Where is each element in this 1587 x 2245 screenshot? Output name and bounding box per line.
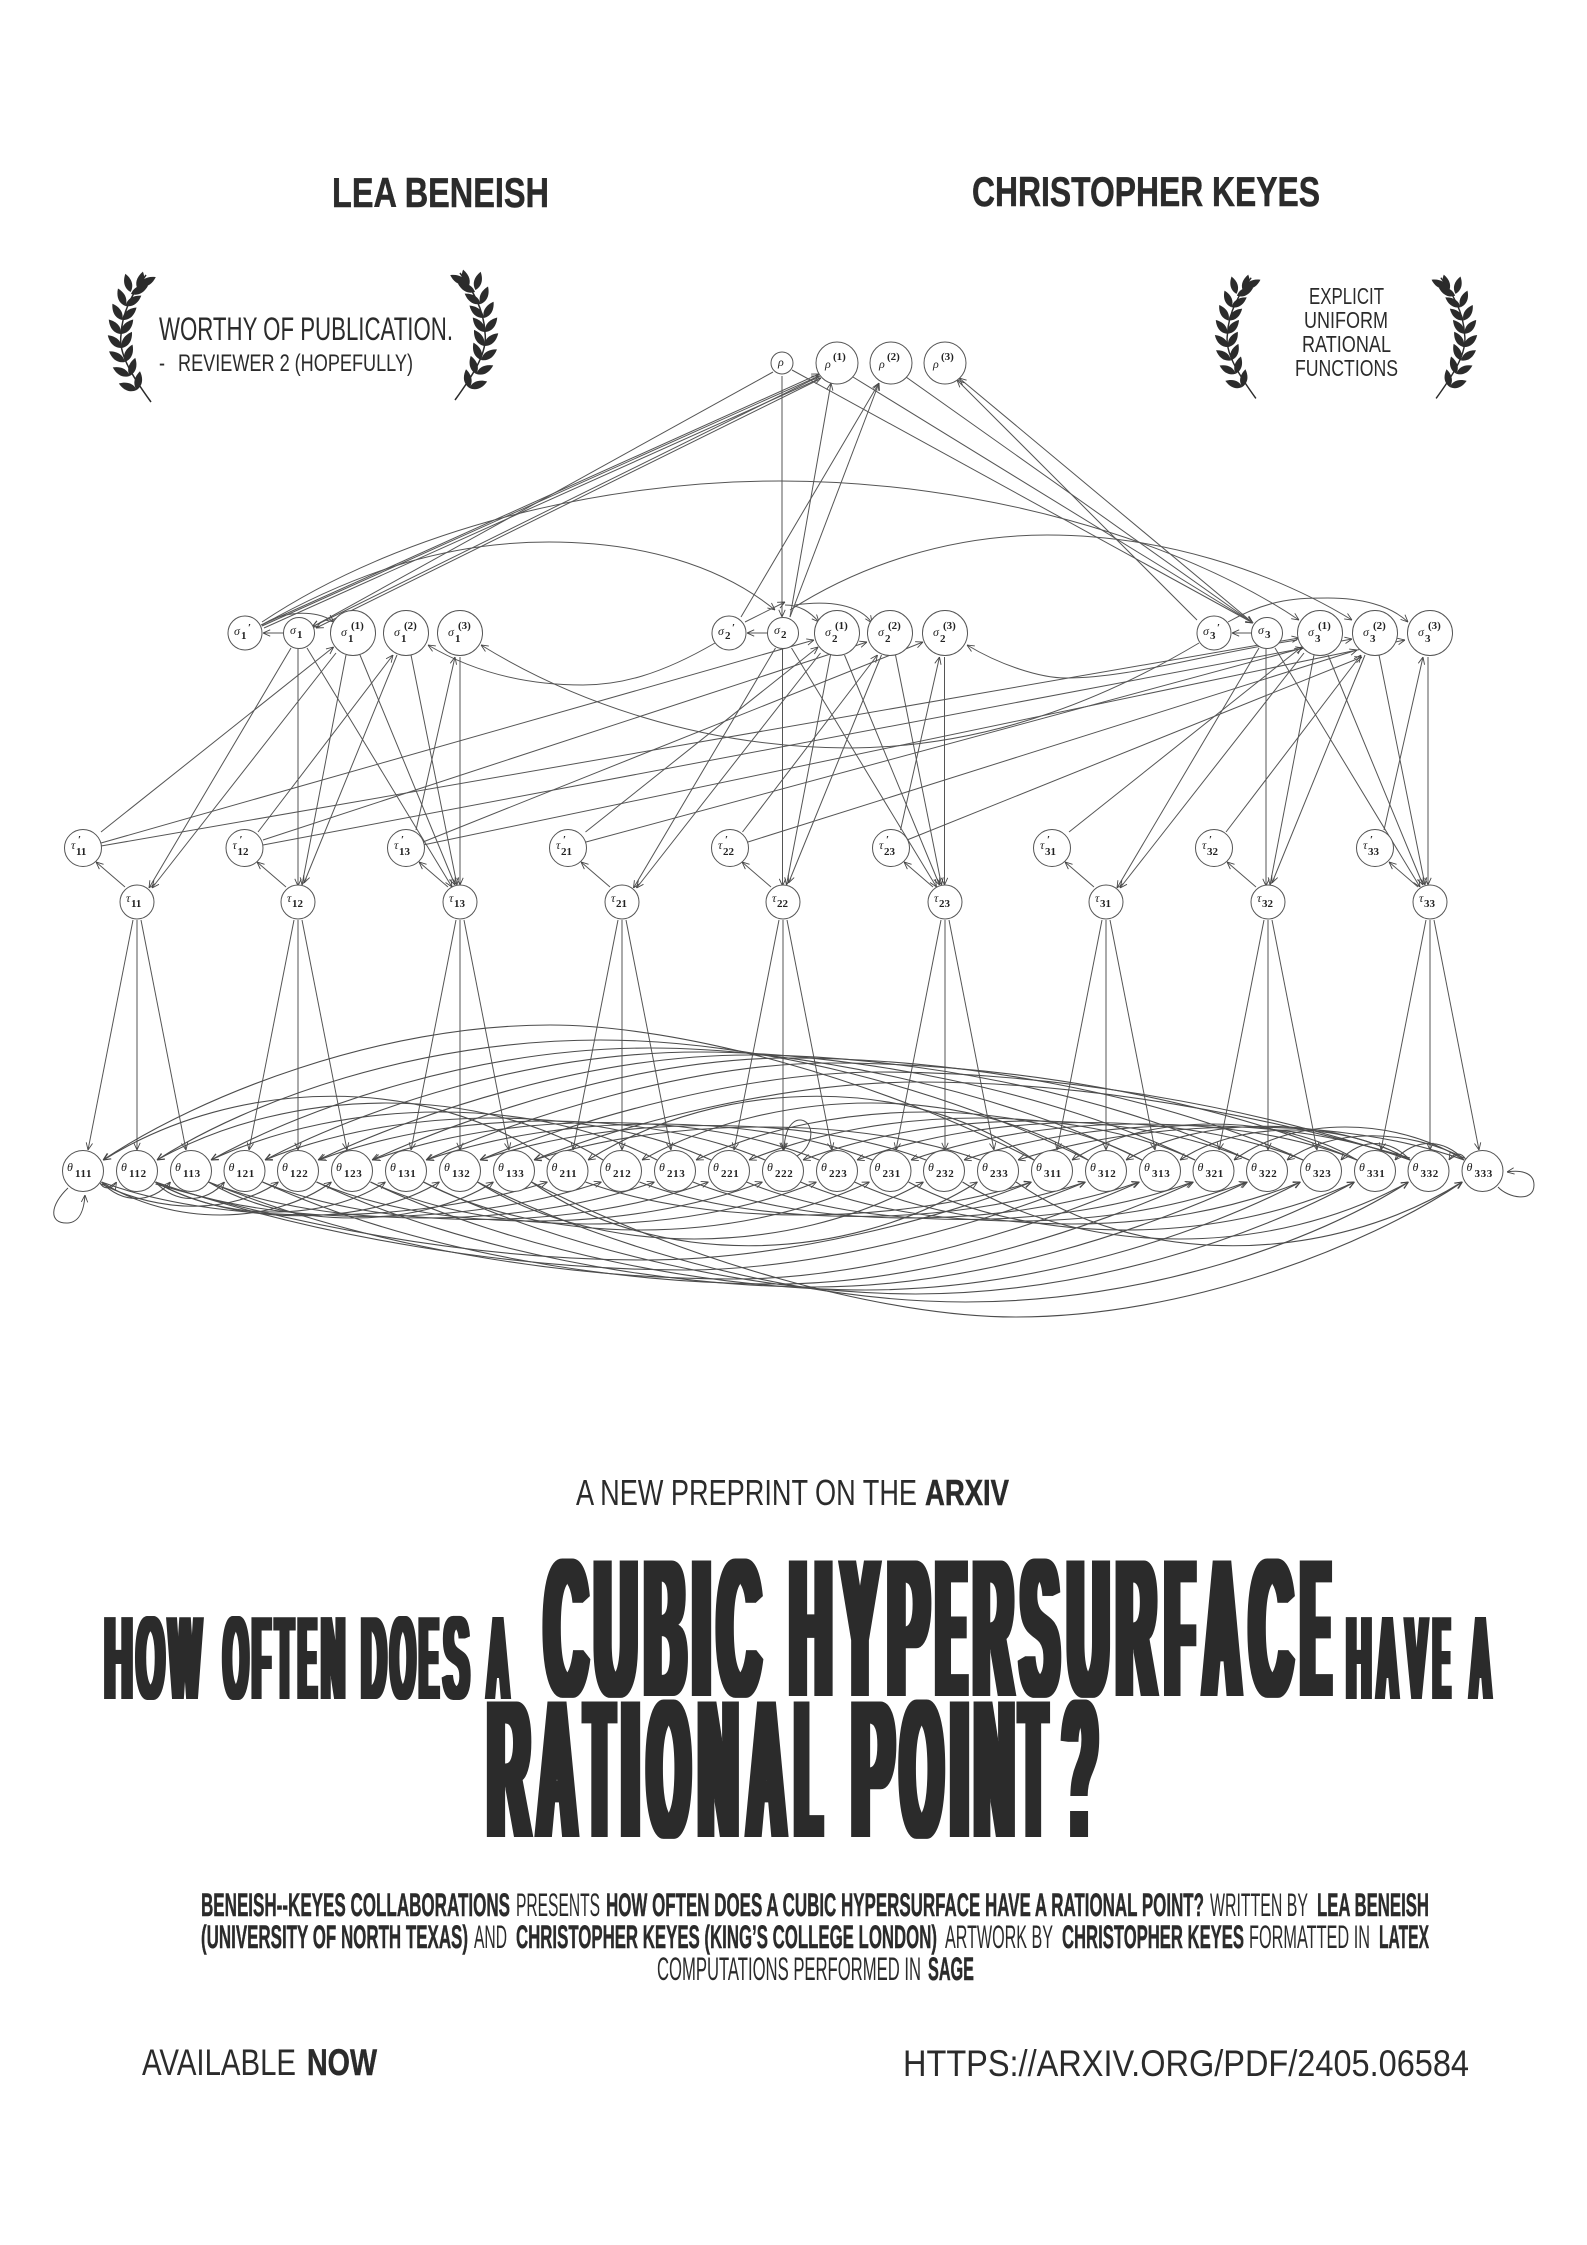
nodes: sigma row: 2 [781, 629, 787, 641]
nodes: sigma row: 1 [455, 633, 460, 645]
title: how often does a cubic hypersurface have a rational point: F [1166, 1518, 1194, 1738]
nodes: sigma row: 1 [401, 633, 406, 645]
nodes: sigma row: (2) [888, 620, 901, 632]
kicker: a new preprint on the arxiv: A NEW PREPRINT ON THE [576, 1472, 917, 1513]
title: how often does a cubic hypersurface have a rational point: S [444, 1592, 469, 1725]
nodes: sigma row: σ [825, 625, 832, 639]
nodes: sigma row: σ [394, 625, 401, 639]
icon: right laurel wreath, right accolade [1212, 274, 1480, 398]
nodes: rho row [771, 342, 966, 384]
nodes: theta row: θ [1305, 1160, 1312, 1174]
nodes: sigma row: 3 [1265, 629, 1271, 641]
nodes: sigma row: ′ [1217, 622, 1220, 634]
nodes: theta row: 233 [990, 1168, 1008, 1180]
nodes: tau prime row: τ [232, 838, 238, 852]
title: how often does a cubic hypersurface have a rational point: A [487, 1592, 509, 1725]
nodes: sigma row: σ [1308, 625, 1315, 639]
nodes: theta row: θ [1090, 1160, 1096, 1174]
nodes: sigma row: 2 [885, 633, 891, 645]
title: how often does a cubic hypersurface have a rational point: D [362, 1592, 386, 1725]
nodes: theta row: 221 [721, 1168, 739, 1180]
nodes: tau prime row: τ [1040, 838, 1045, 852]
title: how often does a cubic hypersurface have a rational point: H [790, 1518, 832, 1738]
nodes: tau prime row: ′ [725, 834, 728, 846]
nodes: tau row: 21 [616, 898, 627, 910]
nodes: sigma row: σ [290, 623, 297, 637]
nodes: tau prime row: τ [394, 838, 399, 852]
credits block: PRESENTS [516, 1887, 600, 1923]
nodes: theta row: 113 [183, 1168, 201, 1180]
nodes: theta row: 132 [452, 1168, 470, 1180]
title: how often does a cubic hypersurface have a rational point: U [595, 1518, 636, 1738]
nodes: sigma row [228, 610, 1452, 656]
nodes: theta row: 231 [882, 1168, 901, 1180]
credits block: LEA BENEISH [1317, 1887, 1429, 1923]
credits block: FORMATTED IN [1249, 1919, 1370, 1955]
nodes: theta row: θ [1251, 1160, 1258, 1174]
nodes: theta row: θ [928, 1160, 934, 1174]
icon: left laurel wreath, left accolade [105, 269, 501, 402]
nodes: tau prime row: 22 [723, 846, 734, 858]
nodes: sigma row: (2) [404, 620, 417, 632]
title: how often does a cubic hypersurface have a rational point: I [622, 1659, 640, 1879]
title: how often does a cubic hypersurface have a rational point: N [322, 1592, 345, 1725]
nodes: tau row [120, 885, 1447, 919]
title: how often does a cubic hypersurface have a rational point: A [1377, 1592, 1398, 1725]
title: how often does a cubic hypersurface have a rational point: O [136, 1592, 164, 1725]
nodes: theta row: 133 [506, 1168, 524, 1180]
nodes: tau prime row: τ [879, 838, 884, 852]
title: how often does a cubic hypersurface have a rational point: C [1250, 1518, 1292, 1738]
nodes: theta row: θ [874, 1160, 881, 1174]
accolade: explicit uniform rational functions: RATIONAL [1302, 331, 1391, 357]
nodes: tau row: 33 [1424, 898, 1436, 910]
footer: arxiv url: HTTPS://ARXIV.ORG/PDF/2405.06584 [903, 2043, 1469, 2084]
nodes: sigma row: ′ [732, 622, 735, 634]
nodes: sigma row: (1) [1318, 620, 1331, 632]
nodes: tau prime row: ′ [1209, 834, 1212, 846]
nodes: sigma row: 2 [725, 630, 731, 642]
nodes: theta row: 232 [936, 1168, 954, 1180]
nodes: theta row: θ [1144, 1160, 1150, 1174]
nodes: tau row: τ [1257, 891, 1262, 905]
title: how often does a cubic hypersurface have a rational point: N [699, 1659, 738, 1879]
nodes: tau row: 13 [454, 898, 466, 910]
title: how often does a cubic hypersurface have a rational point: S [1021, 1518, 1058, 1738]
nodes: rho row: ρ [777, 355, 784, 369]
credits block: (UNIVERSITY OF NORTH TEXAS) [201, 1919, 468, 1955]
nodes: theta row: θ [282, 1160, 288, 1174]
title: how often does a cubic hypersurface have a rational point: H [104, 1592, 132, 1725]
nodes: theta row: 222 [775, 1168, 793, 1180]
nodes: sigma row: 3 [1210, 630, 1216, 642]
accolade: explicit uniform rational functions: EXPLICIT [1309, 283, 1384, 309]
author name: Lea Beneish: LEA BENEISH [332, 169, 549, 216]
nodes: sigma row: σ [448, 625, 455, 639]
title: how often does a cubic hypersurface have a rational point: E [1302, 1518, 1330, 1738]
nodes: theta row: 212 [613, 1168, 631, 1180]
nodes: sigma row: 1 [348, 633, 354, 645]
diagram: dependency graph of rho, sigma, tau and theta nodes [54, 342, 1534, 1317]
nodes: theta row: θ [605, 1160, 612, 1174]
nodes: tau prime row: 33 [1368, 846, 1380, 858]
title: how often does a cubic hypersurface have a rational point: B [645, 1518, 686, 1738]
edges: rho and sigma connections [101, 370, 1428, 888]
nodes: theta row: 312 [1098, 1168, 1116, 1180]
nodes: sigma row: (2) [1373, 620, 1386, 632]
credits block: CHRISTOPHER KEYES [1062, 1919, 1244, 1955]
title: how often does a cubic hypersurface have a rational point: O [648, 1659, 690, 1879]
footer: available now: NOW [307, 2042, 377, 2083]
title: how often does a cubic hypersurface have a rational point: C [545, 1518, 587, 1738]
title: how often does a cubic hypersurface have a rational point: R [974, 1518, 1012, 1738]
nodes: tau row: 31 [1100, 898, 1111, 910]
nodes: theta row: θ [1198, 1160, 1204, 1174]
credits block: ARTWORK BY [945, 1919, 1053, 1955]
nodes: theta row: 131 [398, 1168, 416, 1180]
nodes: tau row: τ [449, 891, 454, 905]
nodes: sigma row: σ [774, 623, 781, 637]
title: how often does a cubic hypersurface have a rational point: ? [1063, 1659, 1098, 1879]
title: how often does a cubic hypersurface have a rational point: A [1204, 1518, 1240, 1738]
nodes: tau prime row: 23 [884, 846, 896, 858]
title: how often does a cubic hypersurface have a rational point: R [1117, 1518, 1156, 1738]
nodes: tau prime row: 32 [1207, 846, 1218, 858]
nodes: theta row: θ [228, 1160, 235, 1174]
nodes: theta row: θ [390, 1160, 396, 1174]
nodes: tau prime row: τ [1363, 838, 1368, 852]
edges: theta self loops [54, 1120, 1534, 1223]
nodes: sigma row: (3) [1428, 620, 1441, 632]
title: how often does a cubic hypersurface have a rational point: P [888, 1518, 928, 1738]
nodes: sigma row: σ [1363, 625, 1370, 639]
accolade: explicit uniform rational functions [1295, 283, 1398, 381]
nodes: tau prime row: 31 [1045, 846, 1056, 858]
nodes: theta row: θ [175, 1160, 182, 1174]
nodes: tau prime row: τ [718, 838, 723, 852]
nodes: sigma row: 1 [241, 630, 246, 642]
nodes: theta row: θ [982, 1160, 988, 1174]
title: how often does a cubic hypersurface have a rational point: T [276, 1592, 293, 1725]
nodes: sigma row: σ [234, 624, 241, 638]
nodes: rho row: ρ [824, 357, 831, 371]
nodes: theta row: 313 [1152, 1168, 1170, 1180]
nodes: theta row: 213 [667, 1168, 685, 1180]
nodes: tau row: τ [772, 891, 777, 905]
title: how often does a cubic hypersurface have a rational point: N [975, 1659, 1014, 1879]
accolade: worthy of publication: WORTHY OF PUBLICATION. [159, 311, 453, 347]
nodes: rho row: (2) [887, 351, 900, 363]
nodes: theta row: θ [552, 1160, 558, 1174]
nodes: tau prime row: τ [71, 838, 76, 852]
nodes: sigma row: 1 [297, 629, 302, 641]
nodes: theta row: θ [498, 1160, 504, 1174]
nodes: tau prime row: ′ [886, 834, 889, 846]
title: how often does a cubic hypersurface have a rational point: Y [842, 1518, 878, 1738]
nodes: theta row: θ [767, 1160, 774, 1174]
title: how often does a cubic hypersurface have a rational point: O [390, 1592, 415, 1725]
title: how often does a cubic hypersurface have a rational point: H [1346, 1592, 1371, 1725]
nodes: theta row: θ [821, 1160, 828, 1174]
nodes: theta row: θ [1466, 1160, 1473, 1174]
nodes: theta row: θ [444, 1160, 450, 1174]
nodes: theta row: 211 [560, 1168, 577, 1180]
nodes: sigma row: (3) [943, 620, 956, 632]
title: how often does a cubic hypersurface have a rational point: R [488, 1659, 530, 1879]
title: how often does a cubic hypersurface have a rational point [104, 1518, 1491, 1879]
credits block: SAGE [928, 1951, 974, 1987]
title: how often does a cubic hypersurface have a rational point: E [420, 1592, 438, 1725]
nodes: theta row: θ [1036, 1160, 1042, 1174]
nodes: sigma row: 2 [832, 633, 838, 645]
nodes: sigma row: σ [878, 625, 885, 639]
nodes: theta row [62, 1150, 1503, 1192]
nodes: tau prime row: τ [1202, 838, 1207, 852]
nodes: theta row: 223 [829, 1168, 847, 1180]
nodes: theta row: 331 [1367, 1168, 1385, 1180]
nodes: rho row: ρ [932, 357, 939, 371]
nodes: sigma row: 3 [1315, 633, 1321, 645]
nodes: theta row: θ [1359, 1160, 1366, 1174]
title: how often does a cubic hypersurface have a rational point: U [1068, 1518, 1108, 1738]
accolade: explicit uniform rational functions: UNIFORM [1304, 307, 1388, 333]
nodes: tau row: τ [1095, 891, 1100, 905]
nodes: tau prime row: 21 [561, 846, 572, 858]
nodes: theta row: θ [336, 1160, 342, 1174]
credits block: WRITTEN BY [1210, 1887, 1308, 1923]
nodes: tau row: τ [287, 891, 292, 905]
title: how often does a cubic hypersurface have a rational point: L [796, 1659, 820, 1879]
kicker: a new preprint on the arxiv: ARXIV [925, 1472, 1009, 1513]
nodes: sigma row: σ [1203, 624, 1210, 638]
nodes: theta row: θ [67, 1160, 74, 1174]
title: how often does a cubic hypersurface have a rational point: A [748, 1659, 785, 1879]
accolade: explicit uniform rational functions: FUNCTIONS [1295, 355, 1398, 381]
nodes: sigma row: σ [1258, 623, 1265, 637]
nodes: sigma row: σ [341, 625, 348, 639]
title: how often does a cubic hypersurface have a rational point: O [224, 1592, 248, 1725]
title: how often does a cubic hypersurface have a rational point: F [252, 1592, 270, 1725]
nodes: theta row: 332 [1420, 1168, 1439, 1180]
nodes: sigma row: σ [718, 624, 725, 638]
nodes: sigma row: 3 [1425, 633, 1431, 645]
title: how often does a cubic hypersurface have a rational point: E [937, 1518, 966, 1738]
credits block: BENEISH--KEYES COLLABORATIONS [201, 1887, 510, 1923]
accolade: worthy of publication: - [159, 350, 165, 377]
nodes: tau row: τ [934, 891, 939, 905]
nodes: theta row: 322 [1259, 1168, 1277, 1180]
nodes: tau prime row: ′ [563, 834, 566, 846]
text: LATEX [1379, 1919, 1429, 1955]
accolade: worthy of publication: REVIEWER 2 (HOPEFULLY) [178, 350, 413, 377]
nodes: tau row: 23 [939, 898, 950, 910]
nodes: theta row: 321 [1206, 1168, 1224, 1180]
nodes: theta row: 122 [290, 1168, 308, 1180]
credits block: COMPUTATIONS PERFORMED IN [657, 1951, 921, 1987]
nodes: theta row: 123 [344, 1168, 362, 1180]
title: how often does a cubic hypersurface have a rational point: E [1434, 1592, 1450, 1725]
footer: available now: AVAILABLE [142, 2042, 296, 2083]
nodes: tau row: 22 [777, 898, 788, 910]
nodes: theta row: 111 [75, 1168, 92, 1180]
edges: theta upper arcs [103, 1025, 1466, 1160]
nodes: theta row: θ [713, 1160, 720, 1174]
nodes: sigma row: (3) [458, 620, 471, 632]
nodes: tau prime row: ′ [1370, 834, 1373, 846]
edges: theta lower arcs [100, 1182, 1462, 1317]
credits block: AND [474, 1919, 507, 1955]
edges: tau to theta fans [88, 862, 1479, 1150]
title: how often does a cubic hypersurface have a rational point: V [1406, 1592, 1427, 1725]
nodes: tau prime row [64, 830, 1394, 866]
nodes: tau prime row: 13 [399, 846, 410, 858]
author name: Christopher Keyes: CHRISTOPHER KEYES [972, 168, 1320, 215]
nodes: rho row: ρ [878, 357, 885, 371]
nodes: theta row: 112 [129, 1168, 147, 1180]
nodes: sigma row: (1) [835, 620, 848, 632]
nodes: theta row: θ [121, 1160, 128, 1174]
title: how often does a cubic hypersurface have a rational point: P [852, 1659, 894, 1879]
nodes: theta row: 323 [1313, 1168, 1331, 1180]
nodes: tau prime row: ′ [78, 834, 81, 846]
nodes: tau row: 32 [1262, 898, 1274, 910]
nodes: sigma row: σ [1418, 625, 1425, 639]
nodes: sigma row: ′ [248, 622, 251, 634]
title: how often does a cubic hypersurface have a rational point: A [538, 1659, 576, 1879]
nodes: tau prime row: ′ [240, 834, 243, 846]
title: how often does a cubic hypersurface have a rational point: I [950, 1659, 968, 1879]
nodes: rho row: (1) [833, 351, 846, 363]
title: how often does a cubic hypersurface have a rational point: T [1021, 1659, 1046, 1879]
title: how often does a cubic hypersurface have a rational point: I [692, 1518, 710, 1738]
nodes: sigma row: 2 [940, 633, 946, 645]
title: how often does a cubic hypersurface have a rational point: T [586, 1659, 613, 1879]
nodes: tau row: τ [126, 891, 131, 905]
nodes: tau row: 11 [131, 898, 141, 910]
title: how often does a cubic hypersurface have a rational point: C [718, 1518, 760, 1738]
title: how often does a cubic hypersurface have a rational point: O [901, 1659, 942, 1879]
title: how often does a cubic hypersurface have a rational point: W [169, 1592, 201, 1725]
title: how often does a cubic hypersurface have a rational point: E [298, 1592, 316, 1725]
nodes: theta row: 121 [236, 1168, 255, 1180]
nodes: tau row: 12 [292, 898, 304, 910]
nodes: tau prime row: τ [556, 838, 561, 852]
nodes: tau row: τ [611, 891, 616, 905]
nodes: sigma row: σ [933, 625, 940, 639]
nodes: tau prime row: ′ [401, 834, 404, 846]
nodes: theta row: 311 [1044, 1168, 1062, 1180]
nodes: tau prime row: ′ [1047, 834, 1050, 846]
nodes: tau prime row: 11 [76, 846, 86, 858]
credits block [201, 1887, 1429, 1987]
nodes: theta row: 333 [1474, 1168, 1493, 1180]
nodes: sigma row: (1) [351, 620, 364, 632]
nodes: theta row: θ [1412, 1160, 1419, 1174]
text: A [1470, 1592, 1491, 1725]
nodes: tau prime row: 12 [238, 846, 249, 858]
nodes: tau row: τ [1419, 891, 1424, 905]
accolade: worthy of publication [159, 311, 453, 377]
credits block: CHRISTOPHER KEYES (KING’S COLLEGE LONDON) [516, 1919, 937, 1955]
nodes: rho row: (3) [941, 351, 954, 363]
nodes: sigma row: 3 [1370, 633, 1376, 645]
nodes: theta row: θ [659, 1160, 666, 1174]
